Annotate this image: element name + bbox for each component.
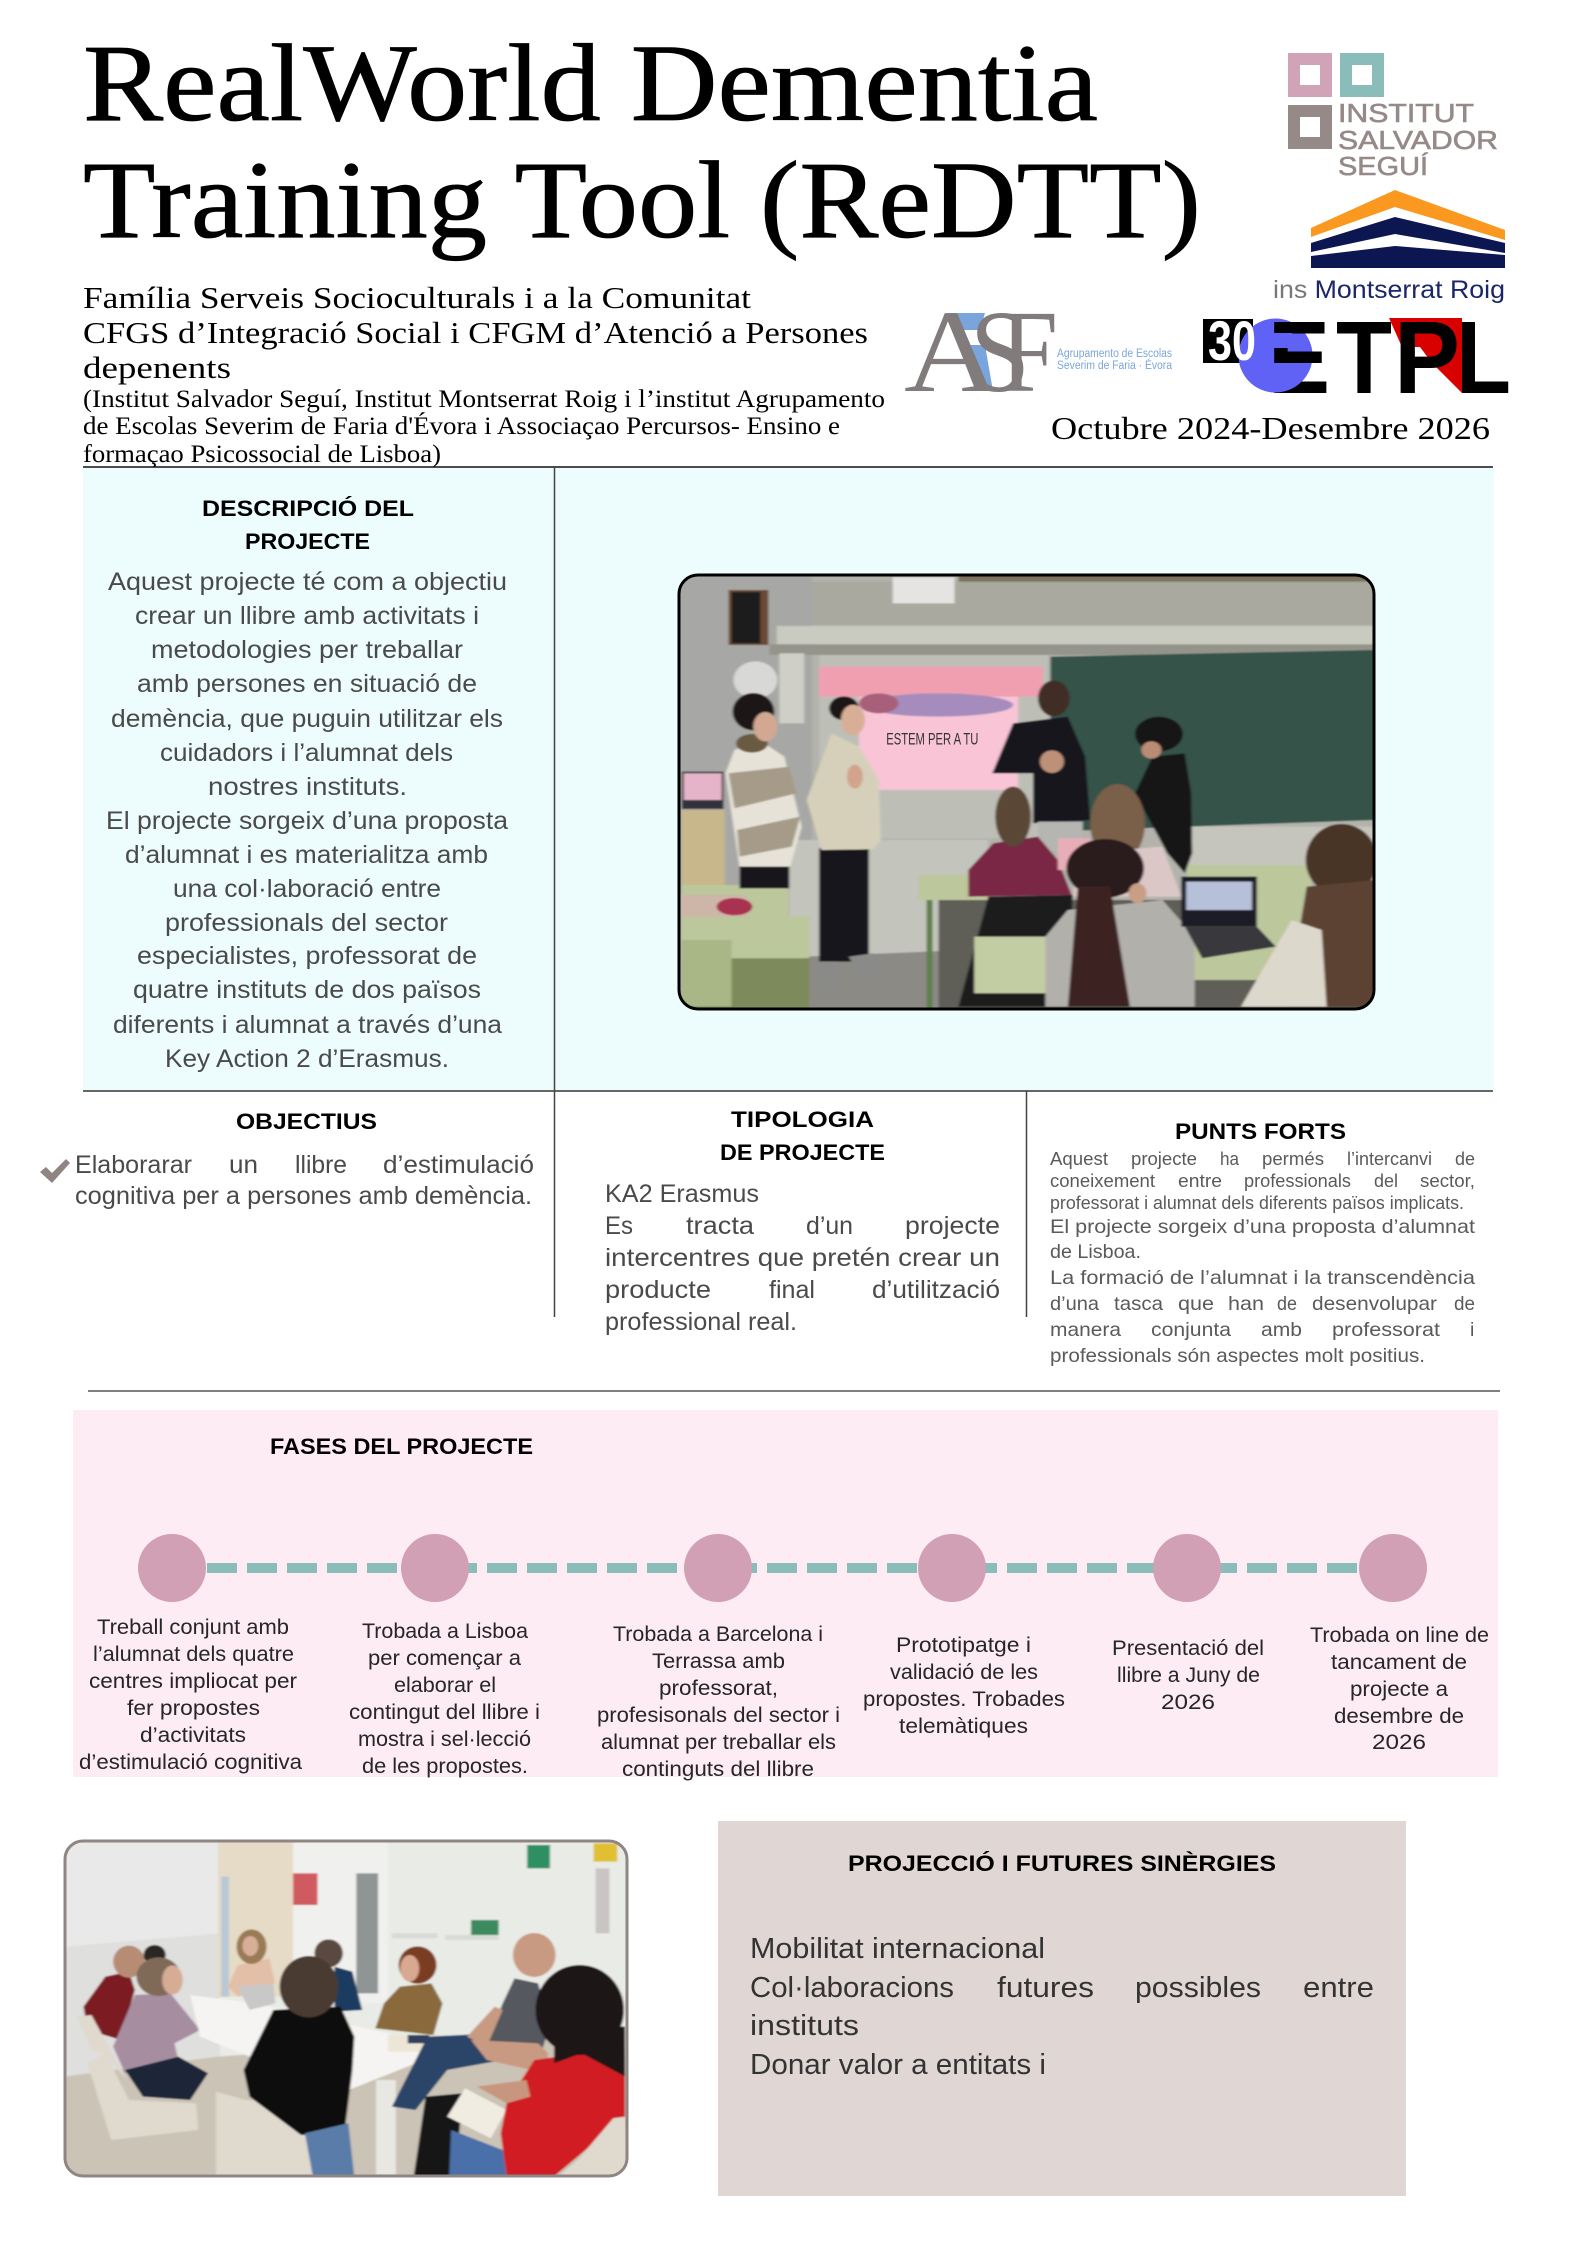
project type text: Es [605, 1212, 633, 1240]
logo: AESF Severim de Faria: Severim de Faria · Évora [1057, 359, 1173, 372]
man in grey tee [392, 2033, 503, 2110]
strengths text: projecte [1131, 1149, 1197, 1169]
participating institutions: (Institut Salvador Seguí, Institut Montserrat Roig i l’institut Agrupamento [83, 386, 885, 413]
title: Training Tool (ReDTT) [83, 139, 1201, 261]
participating institutions [83, 386, 885, 468]
boy two [819, 848, 869, 962]
boy one [740, 865, 789, 888]
phase 2 text: mostra i sel·lecció [358, 1728, 531, 1751]
strengths text: amb [1261, 1319, 1302, 1341]
description text: Key Action 2 d’Erasmus. [165, 1045, 449, 1073]
logo: AESF Severim de Faria: A [904, 286, 1000, 417]
woman in pink [228, 1958, 275, 1997]
projection text: Donar valor a entitats i [750, 2049, 1046, 2081]
description text: amb persones en situació de [137, 670, 477, 698]
logo: Institut Salvador Seguí: SALVADOR [1338, 125, 1498, 155]
logo: ETPL 30 [1203, 318, 1508, 393]
project type text: final [769, 1276, 815, 1304]
logo: ETPL 30: P [1394, 300, 1460, 415]
phase 1 text: fer propostes [127, 1697, 260, 1720]
strengths text: de Lisboa. [1050, 1241, 1141, 1263]
strengths text: i [1470, 1319, 1474, 1341]
phase 2 text: de les propostes. [362, 1755, 528, 1778]
projection text: entre [1303, 1972, 1374, 2004]
phase 1 text: Treball conjunt amb [97, 1616, 289, 1639]
phase 3 text: continguts del llibre [622, 1758, 814, 1781]
heading: description [202, 496, 414, 554]
phase 4 text: Prototipatge i [896, 1634, 1031, 1657]
timeline [138, 1534, 1427, 1602]
logo: ins Montserrat Roig: ins Montserrat Roig [1273, 276, 1505, 304]
heading: strengths: PUNTS FORTS [1175, 1119, 1346, 1144]
phase 6 text: projecte a [1350, 1678, 1448, 1701]
panel: project phases [73, 1410, 1498, 1781]
woman in navy [335, 1967, 362, 2012]
panel: project description [83, 467, 1494, 1317]
heading: project type: TIPOLOGIA [731, 1107, 874, 1132]
panel: objectives [40, 1109, 534, 1210]
description text: especialistes, professorat de [137, 942, 477, 970]
heading: project phases: FASES DEL PROJECTE [270, 1434, 533, 1459]
phase 3 text [597, 1623, 840, 1781]
woman in black [244, 2007, 354, 2135]
logo: AESF Severim de Faria: Agrupamento de Escolas [1057, 348, 1172, 360]
subtitle: family and courses: CFGS d’Integració Social i CFGM d’Atenció a Persones [83, 315, 868, 350]
logo: ETPL 30: E [1268, 300, 1330, 415]
strengths text: professorat i alumnat dels diferents països implicats. [1050, 1193, 1464, 1213]
strengths text: ha [1220, 1149, 1240, 1169]
phase 4 text: propostes. Trobades [863, 1688, 1065, 1711]
logo: ETPL 30: T [1336, 300, 1392, 415]
objective text: d’estimulació [383, 1151, 534, 1179]
phase 2 text [349, 1620, 540, 1778]
phase 6 text: 2026 [1372, 1731, 1426, 1754]
project type text: professional real. [605, 1308, 797, 1336]
strengths text: de [1454, 1293, 1475, 1315]
phase 4 text [863, 1634, 1065, 1738]
objective text [75, 1151, 534, 1210]
projection text: Col·laboracions [750, 1972, 954, 2004]
strengths text: manera [1050, 1319, 1121, 1341]
phase 2 text: contingut del llibre i [349, 1701, 540, 1724]
photo: students presenting in classroom [678, 573, 1377, 1010]
phase 1 text [79, 1616, 302, 1774]
table [190, 1995, 421, 2090]
phase 6 text: tancament de [1331, 1651, 1467, 1674]
phase 6 text [1310, 1624, 1489, 1754]
phase 4 text: telemàtiques [899, 1715, 1028, 1738]
participating institutions: de Escolas Severim de Faria d'Évora i Associaçao Percursos- Ensino e [83, 412, 840, 440]
strengths text: de [1277, 1293, 1297, 1315]
phase 3 text: professorat, [659, 1677, 778, 1700]
phase 5 text: Presentació del [1112, 1637, 1264, 1660]
strengths text: desenvolupar [1312, 1293, 1438, 1315]
description text: El projecte sorgeix d’una proposta [106, 807, 508, 835]
woman in lilac [113, 1993, 200, 2073]
strengths text: coneixement [1050, 1171, 1155, 1191]
description text: cuidadors i l’alumnat dels [160, 739, 453, 767]
projection text: instituts [750, 2010, 859, 2042]
objective text: cognitiva per a persones amb demència. [75, 1182, 532, 1210]
project type text: d’utilització [872, 1276, 1000, 1304]
seated students [968, 837, 1072, 897]
description text [106, 568, 508, 1073]
project type text: intercentres que pretén crear un [605, 1244, 1000, 1272]
phase 3 text: Trobada a Barcelona i [613, 1623, 823, 1646]
strengths text: del [1374, 1171, 1398, 1191]
project type text: producte [605, 1276, 711, 1304]
woman in red [414, 2093, 463, 2177]
logo: AESF Severim de Faria [904, 286, 1173, 417]
strengths text: de [1455, 1149, 1475, 1169]
heading: description: DESCRIPCIÓ DEL [202, 496, 414, 521]
description text: una col·laboració entre [173, 875, 441, 903]
strengths text: Aquest [1050, 1149, 1108, 1169]
projection text: futures [997, 1972, 1094, 2004]
strengths text: permés [1262, 1149, 1324, 1169]
phase 3 text: profesisonals del sector i [597, 1704, 840, 1727]
strengths text: professionals són aspectes molt positius. [1050, 1345, 1425, 1367]
title [83, 22, 1201, 261]
phase 5 text [1112, 1637, 1264, 1714]
logo: ins Montserrat Roig [1273, 190, 1505, 304]
heading: projection: PROJECCIÓ I FUTURES SINÈRGIES [848, 1851, 1276, 1876]
heading: objectives: OBJECTIUS [236, 1109, 377, 1134]
description text: Aquest projecte té com a objectiu [108, 568, 507, 596]
strengths text: sector, [1420, 1171, 1475, 1191]
strengths text: tasca [1114, 1293, 1163, 1315]
phase 2 text: per començar a [368, 1647, 521, 1670]
phase 3 text: Terrassa amb [652, 1650, 785, 1673]
strengths text: d’una [1050, 1293, 1099, 1315]
photo: team meeting around a table [64, 1840, 629, 2177]
logo: ETPL 30: L [1456, 300, 1511, 415]
description text: d’alumnat i es materialitza amb [125, 841, 488, 869]
logo: Institut Salvador Seguí: SEGUÍ [1338, 151, 1429, 181]
strengths text: han [1228, 1293, 1264, 1315]
phase 1 text: centres impliocat per [89, 1670, 297, 1693]
description text: professionals del sector [165, 909, 448, 937]
strengths text: professorat [1332, 1319, 1441, 1341]
heading: project type [720, 1107, 885, 1165]
objective text: un [229, 1151, 258, 1179]
phase 2 text: elaborar el [394, 1674, 496, 1697]
projection text [750, 1933, 1374, 2081]
project type text: tracta [686, 1212, 754, 1240]
description text: metodologies per treballar [151, 636, 463, 664]
strengths text: professionals [1244, 1171, 1351, 1191]
phase 1 text: d’activitats [140, 1724, 246, 1747]
heading: project type: DE PROJECTE [720, 1140, 885, 1165]
phase 2 text: Trobada a Lisboa [362, 1620, 528, 1643]
strengths text: El projecte sorgeix d’una proposta d’alumnat [1050, 1216, 1476, 1238]
project type text: d’un [806, 1212, 853, 1240]
man in red [83, 1972, 135, 2040]
woman in brown [375, 1983, 443, 2035]
subtitle: family and courses: depenents [83, 350, 231, 385]
objective text: Elaborarar [75, 1151, 192, 1179]
heading: description: PROJECTE [245, 529, 370, 554]
strengths text: que [1178, 1293, 1214, 1315]
strengths text: La formació de l’alumnat i la transcendència [1050, 1267, 1475, 1289]
title: RealWorld Dementia [83, 22, 1098, 144]
logo: AESF Severim de Faria: S [970, 286, 1030, 417]
presenter four [1135, 753, 1192, 873]
description text: quatre instituts de dos països [133, 976, 481, 1004]
strengths text: l’intercanvi [1347, 1149, 1432, 1169]
description text: crear un llibre amb activitats i [135, 602, 479, 630]
participating institutions: formaçao Psicossocial de Lisboa) [83, 441, 441, 468]
projection text: Mobilitat internacional [750, 1933, 1045, 1965]
projection text: possibles [1135, 1972, 1261, 2004]
description text: demència, que puguin utilitzar els [111, 705, 503, 733]
logo: ETPL 30: 30 [1208, 309, 1256, 372]
phase 6 text: Trobada on line de [1310, 1624, 1489, 1647]
project dates: Octubre 2024-Desembre 2026 [1051, 410, 1490, 446]
logo: AESF Severim de Faria: F [1000, 286, 1058, 417]
phase 4 text: validació de les [890, 1661, 1038, 1684]
strengths text: entre [1178, 1171, 1222, 1191]
description text: diferents i alumnat a través d’una [113, 1011, 502, 1039]
logo: Institut Salvador Seguí [1288, 53, 1498, 181]
panel: project type [605, 1107, 1000, 1336]
phase 5 text: 2026 [1161, 1691, 1215, 1714]
description text: nostres instituts. [208, 773, 407, 801]
project type text [605, 1180, 1000, 1336]
phase 3 text: alumnat per treballar els [601, 1731, 836, 1754]
phase 5 text: llibre a Juny de [1117, 1664, 1260, 1687]
strengths text: conjunta [1151, 1319, 1231, 1341]
photo: students presenting in classroom: ESTEM PER A TU [886, 730, 978, 748]
strengths text [1050, 1149, 1476, 1367]
panel: projection and future synergies [718, 1821, 1406, 2196]
subtitle: family and courses: Família Serveis Socioculturals i a la Comunitat [83, 280, 751, 315]
chairs [87, 2053, 198, 2140]
phase 6 text: desembre de [1334, 1705, 1464, 1728]
icon: check mark [40, 1159, 70, 1183]
subtitle: family and courses [83, 280, 868, 385]
panel: strengths [1050, 1119, 1476, 1367]
phase 1 text: l’alumnat dels quatre [93, 1643, 294, 1666]
objective text: llibre [295, 1151, 347, 1179]
project type text: KA2 Erasmus [605, 1180, 759, 1208]
project type text: projecte [905, 1212, 1000, 1240]
phase 1 text: d’estimulació cognitiva [79, 1751, 302, 1774]
boy three [992, 717, 1090, 823]
logo: Institut Salvador Seguí: INSTITUT [1338, 98, 1474, 128]
